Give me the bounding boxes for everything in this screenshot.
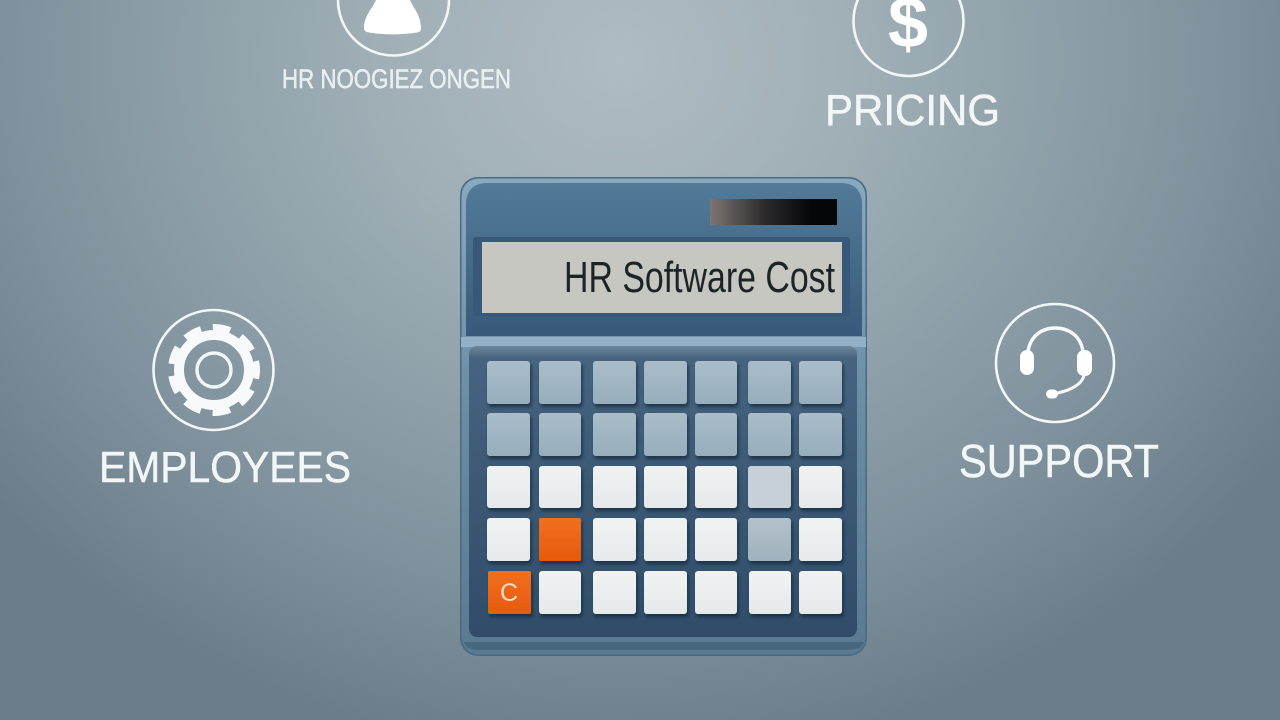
key row 5 xyxy=(488,571,842,614)
employees icon and label xyxy=(99,310,351,492)
key row 3 xyxy=(487,466,842,508)
calculator xyxy=(460,177,867,656)
label: employees: EMPLOYEES xyxy=(99,443,351,492)
label: pricing: PRICING xyxy=(825,86,1000,135)
keypad keys xyxy=(487,361,842,614)
icon: dollar in circle xyxy=(854,0,964,76)
icon: headset in circle xyxy=(996,304,1114,422)
HR management icon and label xyxy=(282,0,511,94)
label: garbled HR heading: HR NOOGIEZ ONGEN xyxy=(282,64,511,94)
label: support: SUPPORT xyxy=(959,435,1159,487)
solar panel xyxy=(710,199,837,225)
display xyxy=(473,237,850,316)
key label: C: C xyxy=(500,579,518,607)
calculator body xyxy=(460,177,867,656)
keypad panel xyxy=(461,337,866,637)
key row 4 xyxy=(487,518,842,561)
pricing icon and label xyxy=(825,0,1000,135)
icon: person in circle xyxy=(338,0,449,56)
key row 2 xyxy=(487,413,842,456)
display: HR Software Cost xyxy=(564,253,835,302)
icon: gear in circle xyxy=(154,310,274,430)
key row 1 xyxy=(487,361,842,404)
support icon and label xyxy=(959,304,1159,487)
